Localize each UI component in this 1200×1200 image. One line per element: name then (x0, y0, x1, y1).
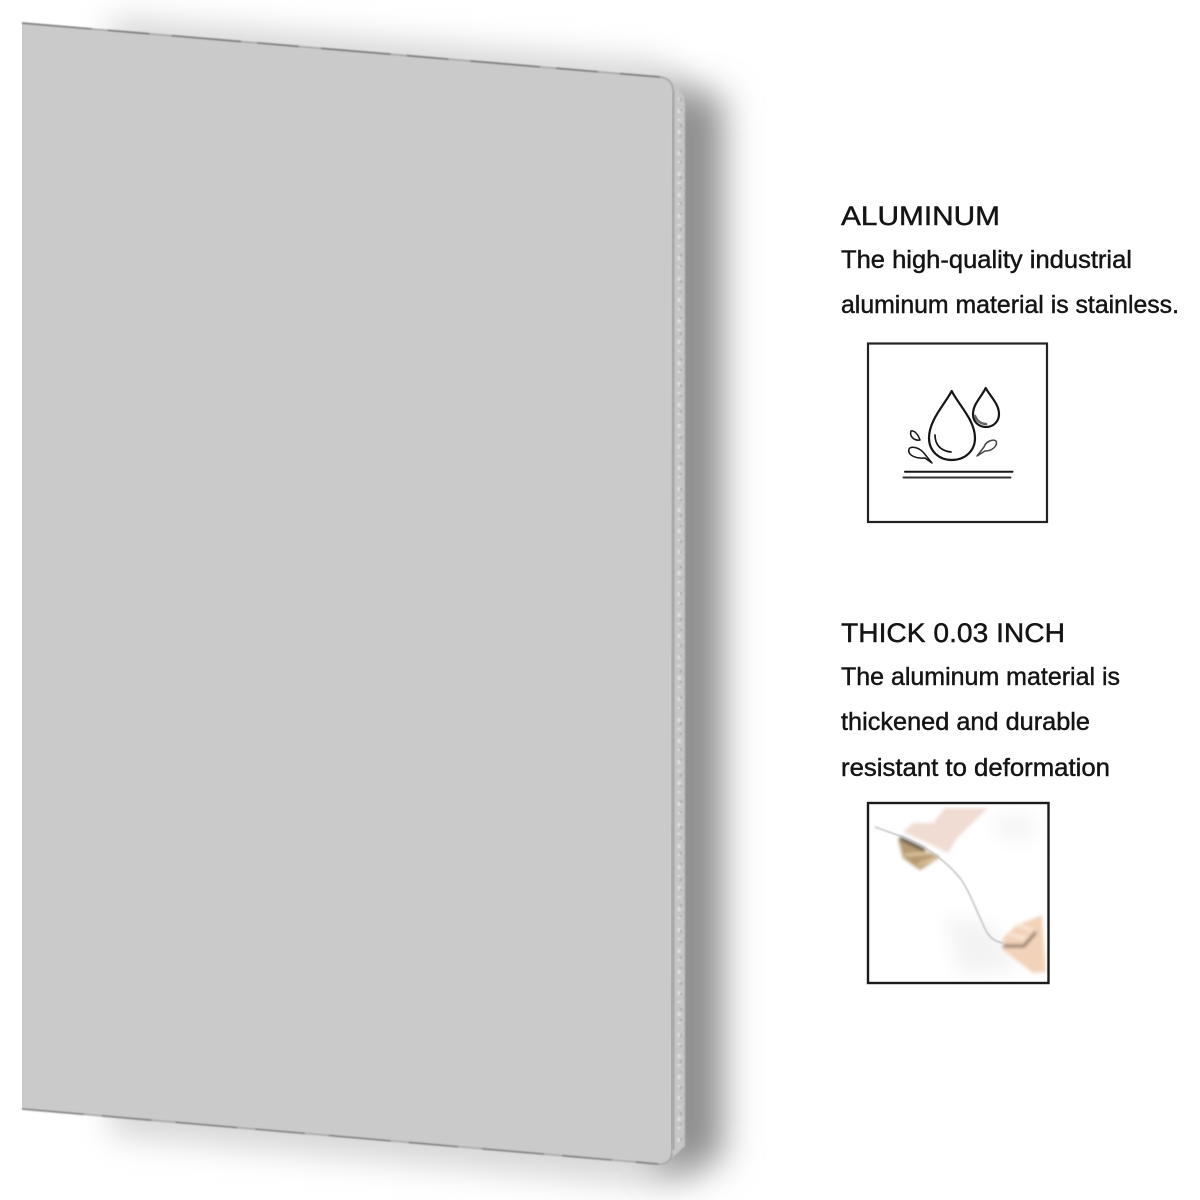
panel: aluminum sheet with shadow (22, 18, 722, 1186)
photo: hands bending the sheet (868, 803, 1048, 983)
text block: aluminum description: The high-quality industrial (841, 246, 1132, 274)
heading: thick 0.03 inch: THICK 0.03 INCH (841, 618, 1065, 648)
sheet front face (22, 23, 672, 1164)
text block: aluminum description (841, 246, 1179, 319)
heading: aluminum: ALUMINUM (841, 201, 1000, 231)
text block: aluminum description: aluminum material is stainless. (841, 291, 1179, 319)
sheet side edge (672, 82, 685, 1158)
text block: thickness description: resistant to deformation (841, 754, 1110, 782)
text block: thickness description (841, 663, 1120, 782)
feature block: aluminum (841, 201, 1179, 522)
feature block: thickness (841, 618, 1120, 983)
icon: water drops on surface (868, 344, 1047, 522)
text block: thickness description: The aluminum material is (841, 663, 1120, 691)
sheet outline highlights (22, 23, 673, 1164)
sheet drop shadow (110, 18, 722, 1186)
text block: thickness description: thickened and durable (841, 708, 1090, 736)
